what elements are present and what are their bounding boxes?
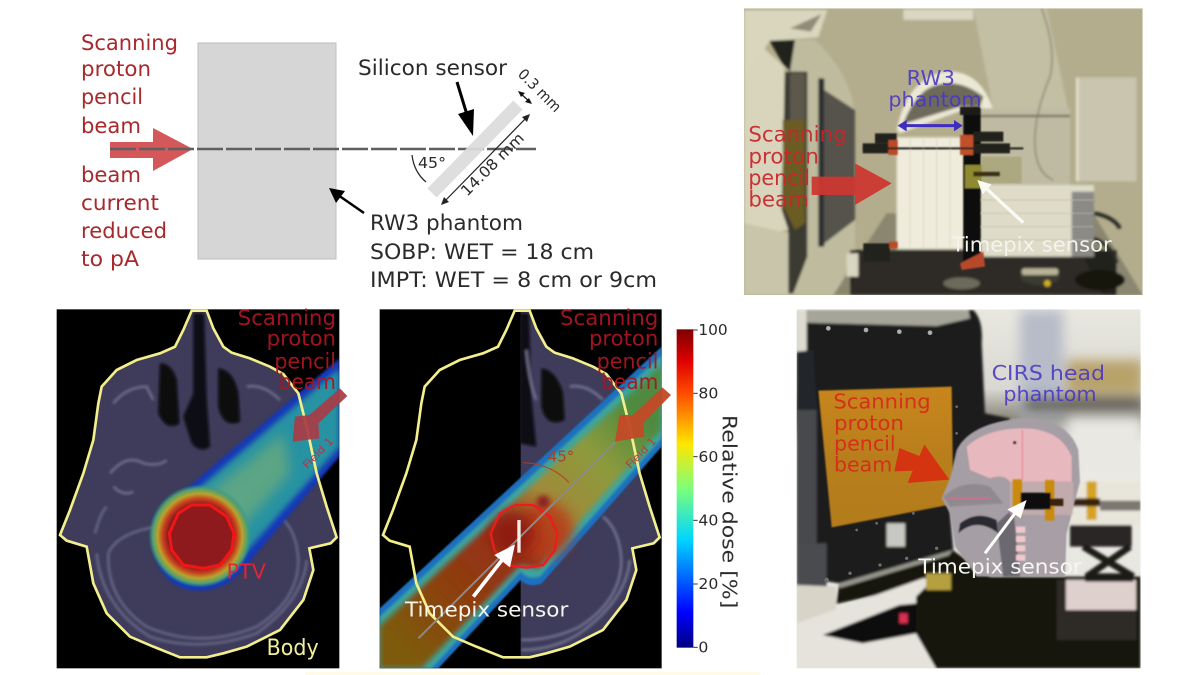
gantry and table surroundings bbox=[797, 310, 1010, 583]
label: Field 1: Field 1 bbox=[300, 435, 336, 471]
label: Body: Body bbox=[267, 636, 319, 661]
label: Timepix sensor: Timepix sensor bbox=[404, 598, 569, 622]
label: CIRS head phantom: phantom bbox=[1003, 382, 1097, 406]
PTV contour bbox=[169, 505, 234, 568]
beam description text: proton bbox=[81, 57, 151, 81]
blue double arrow: phantom width bbox=[898, 120, 963, 131]
label: scanning proton pencil beam bbox=[560, 306, 658, 395]
45 degree angle: 45° bbox=[418, 154, 446, 172]
faint strip at page bottom bbox=[305, 672, 760, 675]
PTV contour bbox=[491, 505, 557, 568]
label: scanning proton pencil beam: pencil bbox=[748, 166, 810, 191]
45 degree angle bbox=[412, 154, 446, 182]
label: scanning proton pencil beam: proton bbox=[748, 144, 819, 169]
panel: photo of RW3 phantom on couch bbox=[744, 8, 1143, 295]
label: scanning proton pencil beam bbox=[834, 393, 929, 472]
white arrow to sensor bbox=[977, 180, 1023, 223]
beam axis bbox=[418, 442, 616, 638]
phantom description: RW3 phantom bbox=[370, 211, 523, 235]
colour bar tick labels: 20 bbox=[698, 576, 718, 593]
sliced head phantom bbox=[942, 418, 1080, 577]
panel: measured dose at 45 degrees bbox=[380, 306, 741, 668]
dose beam bbox=[148, 358, 339, 591]
panel: schematic of RW3 phantom setup bbox=[81, 31, 657, 292]
beam direction arrow bbox=[293, 388, 347, 442]
body contour bbox=[383, 311, 660, 657]
dashed beam axis bbox=[110, 148, 536, 150]
phantom description: IMPT: WET = 8 cm or 9cm bbox=[370, 268, 657, 292]
red beam arrow bbox=[812, 163, 892, 205]
colour bar bbox=[677, 322, 741, 657]
panel: dose distribution on CT bbox=[57, 306, 347, 668]
beam description text: pencil bbox=[81, 85, 143, 109]
45 degree arc bbox=[523, 449, 574, 483]
45 degree arc: 45° bbox=[548, 449, 574, 466]
label: scanning proton pencil beam: beam bbox=[834, 453, 892, 477]
CT slice bbox=[60, 311, 337, 657]
white arrow to sensor bbox=[473, 544, 515, 597]
beam description text: beam bbox=[81, 163, 141, 187]
body contour bbox=[60, 311, 337, 657]
label: scanning proton pencil beam: Scanning bbox=[238, 306, 336, 331]
label: scanning proton pencil beam: pencil bbox=[597, 349, 658, 374]
panel: photo of CIRS head phantom bbox=[797, 309, 1143, 668]
half CT slice bbox=[520, 312, 658, 656]
colour bar tick labels: 100 bbox=[698, 322, 728, 339]
label: scanning proton pencil beam: pencil bbox=[274, 349, 336, 374]
label: CIRS head phantom bbox=[992, 364, 1103, 406]
sensor thickness dimension: 0.3 mm bbox=[514, 65, 565, 116]
beam description text: to pA bbox=[81, 247, 140, 271]
arrow to phantom bbox=[329, 188, 364, 213]
colour bar tick labels: 0 bbox=[698, 640, 708, 657]
beam description text: Scanning bbox=[81, 31, 178, 55]
label: CIRS head phantom: CIRS head bbox=[992, 361, 1105, 385]
label: scanning proton pencil beam: proton bbox=[267, 327, 336, 352]
sensor marker bbox=[517, 520, 521, 553]
phantom block bbox=[198, 43, 336, 259]
label: RW3 phantom: RW3 bbox=[907, 66, 955, 90]
colour bar tick labels: 80 bbox=[698, 386, 718, 403]
dose beam bbox=[380, 347, 662, 668]
label: RW3 phantom: phantom bbox=[888, 88, 982, 112]
beam description text: reduced bbox=[81, 219, 167, 243]
label: Timepix sensor: Timepix sensor bbox=[951, 233, 1112, 257]
label: scanning proton pencil beam: beam bbox=[748, 188, 809, 213]
orange film on gantry bbox=[818, 387, 953, 527]
beam direction arrow bbox=[615, 387, 671, 442]
beam arrow bbox=[110, 128, 193, 171]
label: scanning proton pencil beam: proton bbox=[834, 411, 904, 435]
colour bar tick labels bbox=[698, 322, 728, 657]
label: scanning proton pencil beam: pencil bbox=[834, 432, 896, 456]
white arrow to sensor bbox=[985, 500, 1027, 553]
label: scanning proton pencil beam: beam bbox=[601, 370, 658, 395]
label: scanning proton pencil beam: Scanning bbox=[748, 123, 847, 148]
label: scanning proton pencil beam bbox=[748, 123, 847, 213]
sensor length dimension: 14.08 mm bbox=[457, 129, 528, 200]
colour bar tick labels: 60 bbox=[698, 449, 718, 466]
label: scanning proton pencil beam: proton bbox=[589, 327, 658, 352]
beam description text bbox=[81, 31, 178, 271]
sensor length dimension bbox=[441, 114, 530, 205]
beam description text: beam bbox=[81, 114, 141, 138]
label: scanning proton pencil beam: Scanning bbox=[560, 306, 658, 331]
label: PTV: PTV bbox=[227, 559, 266, 583]
silicon sensor label: Silicon sensor bbox=[358, 56, 507, 80]
label: scanning proton pencil beam: Scanning bbox=[833, 389, 931, 413]
label: scanning proton pencil beam bbox=[238, 306, 336, 395]
arrow to silicon sensor bbox=[457, 82, 474, 136]
label: Field 1: Field 1 bbox=[623, 435, 659, 471]
screw dots bbox=[824, 326, 958, 582]
colour bar title: Relative dose [%] bbox=[718, 415, 741, 608]
silicon sensor bar bbox=[432, 105, 518, 193]
phantom description bbox=[370, 211, 657, 292]
beam description text: current bbox=[81, 191, 159, 215]
red beam arrow bbox=[894, 445, 949, 483]
label: Timepix sensor: Timepix sensor bbox=[917, 554, 1082, 578]
colour bar tick labels: 40 bbox=[698, 513, 718, 530]
label: scanning proton pencil beam: beam bbox=[279, 370, 336, 395]
phantom description: SOBP: WET = 18 cm bbox=[370, 240, 594, 264]
label: RW3 phantom bbox=[888, 66, 982, 112]
